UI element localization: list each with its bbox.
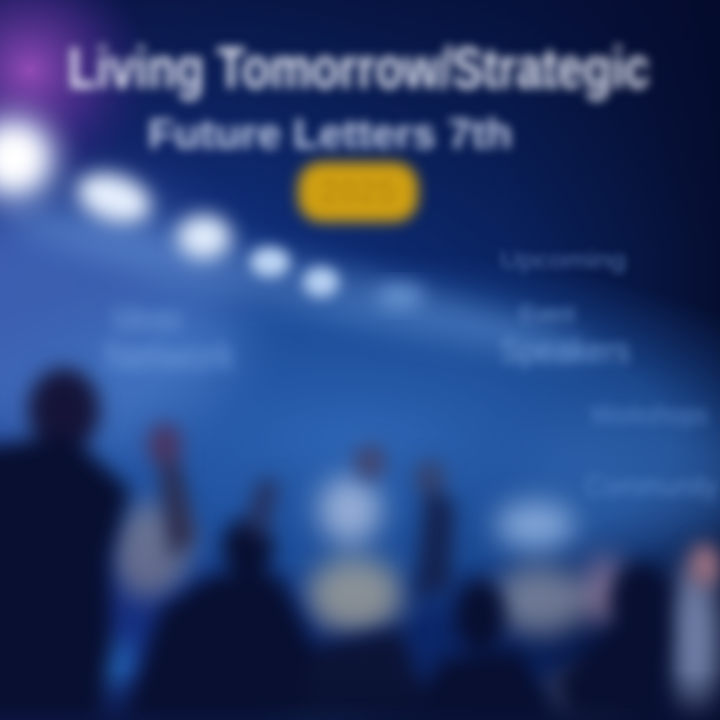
badge: yellow pill bbox=[298, 162, 418, 222]
text block: right column: Speakers bbox=[500, 332, 630, 370]
shadow: bottom of crowd bbox=[0, 670, 720, 720]
subtitle: Future Letters 7th bbox=[148, 110, 512, 157]
text block: left column bbox=[105, 300, 236, 379]
text block: top right caption: Upcoming bbox=[500, 247, 626, 274]
silhouette: large left figure bbox=[0, 368, 130, 720]
silhouette: lower right figure bbox=[415, 579, 555, 720]
text block: left column: Network bbox=[105, 332, 236, 379]
stage glow behind crowd bbox=[71, 476, 719, 718]
silhouette: raised arm left bbox=[148, 423, 195, 560]
text block: right column: Event bbox=[520, 301, 575, 328]
silhouette: centre figure bbox=[300, 444, 455, 720]
text block: right column bbox=[500, 301, 630, 370]
text block: left column: Ideas bbox=[112, 300, 182, 338]
silhouette: right figure bbox=[555, 543, 720, 720]
text block: lower right lines bbox=[585, 399, 718, 503]
badge: yellow pill: 2025 bbox=[320, 173, 396, 211]
crowd silhouettes bbox=[0, 368, 720, 720]
silhouette: centre-left figure bbox=[125, 480, 335, 720]
spotlight: row of stage lights bbox=[0, 112, 598, 378]
